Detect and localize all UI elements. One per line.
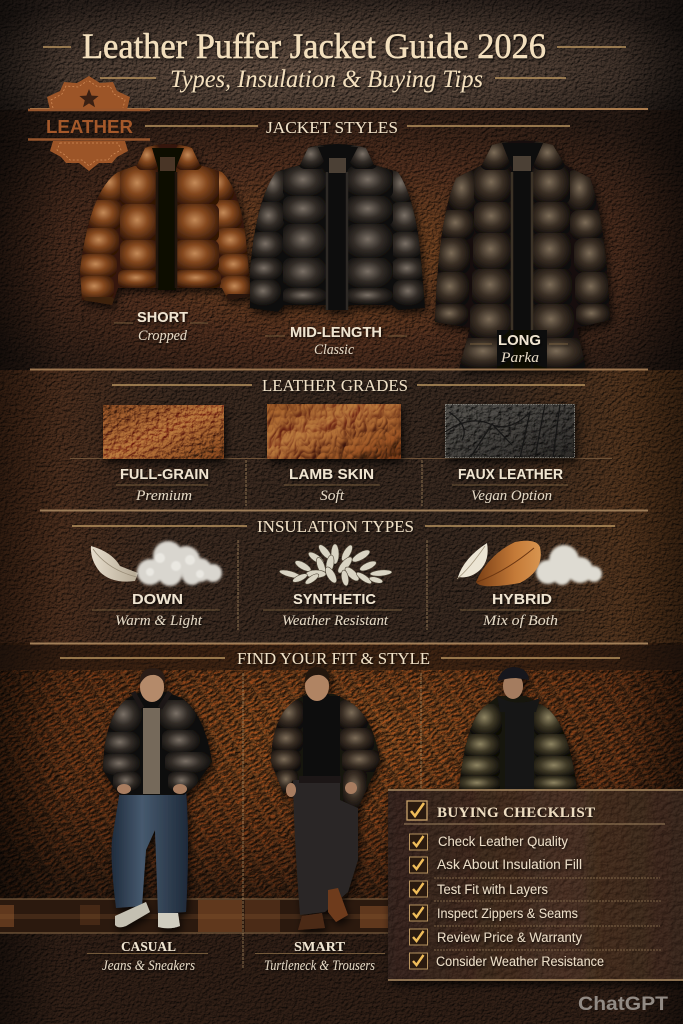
label: full-grain: Premium [135,488,192,504]
label: casual [87,940,208,974]
checklist heading: BUYING CHECKLIST [437,805,595,821]
person: third outfit [457,667,579,792]
checklist item 5: Review Price & Warranty [437,930,582,945]
section rule [40,510,648,512]
buying checklist panel [388,789,683,981]
label: faux leather [452,466,568,504]
title: Leather Puffer Jacket Guide 2026 [82,26,546,66]
heading: jacket styles: JACKET STYLES [266,118,398,137]
label: full-grain: FULL-GRAIN [120,466,209,483]
label: long: LONG [498,332,541,349]
swatch: full-grain [103,405,224,459]
checklist item 1: Check Leather Quality [438,834,568,849]
label: lamb skin: Soft [320,488,345,504]
checklist item 3: Test Fit with Layers [437,882,548,897]
label: mid-length [265,324,407,358]
label: synthetic [263,591,402,629]
jacket: short brown [78,140,253,310]
label: down: Warm & Light [115,613,203,629]
checklist heading [404,801,665,824]
fit dividers [243,673,421,968]
leather badge: LEATHER [46,117,133,137]
section rule [30,642,648,644]
heading: find your fit and style [0,645,683,670]
leather badge [28,76,150,171]
checklist item 4: Inspect Zippers & Seams [437,906,578,921]
checklist item 2: Ask About Insulation Fill [437,857,582,872]
label: smart: SMART [294,940,346,955]
swatch: lamb skin [267,404,401,459]
label: long [470,332,568,366]
label: long: Parka [500,350,539,366]
label: short: Cropped [138,328,187,344]
label: hybrid: HYBRID [492,591,552,608]
icon: synthetic fibres [279,543,392,586]
subtitle: Types, Insulation & Buying Tips [170,66,483,93]
label: hybrid: Mix of Both [482,613,558,629]
section rule: jacket styles top [30,108,648,110]
label: synthetic: Weather Resistant [282,613,389,629]
label: faux leather: FAUX LEATHER [458,466,563,483]
label: hybrid [460,591,584,629]
icon: hybrid feathers and fill [457,541,602,586]
heading: insulation types: INSULATION TYPES [257,517,414,536]
jacket: long parka [433,136,613,371]
label: down [92,591,220,629]
label: lamb skin: LAMB SKIN [289,466,374,483]
jacket: mid-length black [248,140,428,315]
label: short: SHORT [137,309,188,326]
label: mid-length: MID-LENGTH [290,324,382,341]
insulation dividers [238,540,427,630]
title rules [43,47,626,78]
grade dividers [246,460,422,506]
swatch: faux leather [445,404,575,458]
checklist item 6: Consider Weather Resistance [436,954,604,969]
label: mid-length: Classic [314,342,354,358]
label: smart [255,940,385,974]
person: casual [100,668,215,928]
label: full-grain [116,466,209,504]
section rule [30,368,648,370]
label: lamb skin [284,466,380,504]
label: down: DOWN [132,591,183,608]
label: synthetic: SYNTHETIC [293,591,376,608]
heading: find your fit and style: FIND YOUR FIT & STYLE [237,649,430,668]
label: faux leather: Vegan Option [471,488,552,504]
person: smart [268,667,383,930]
label: casual: CASUAL [121,940,176,955]
icon: down feather and cloud [91,541,222,586]
label: casual: Jeans & Sneakers [102,958,195,974]
label: short [114,309,208,344]
floor band [0,899,388,933]
heading: leather grades: LEATHER GRADES [262,376,408,395]
label: smart: Turtleneck & Trousers [264,958,375,974]
watermark: ChatGPT [578,994,668,1015]
